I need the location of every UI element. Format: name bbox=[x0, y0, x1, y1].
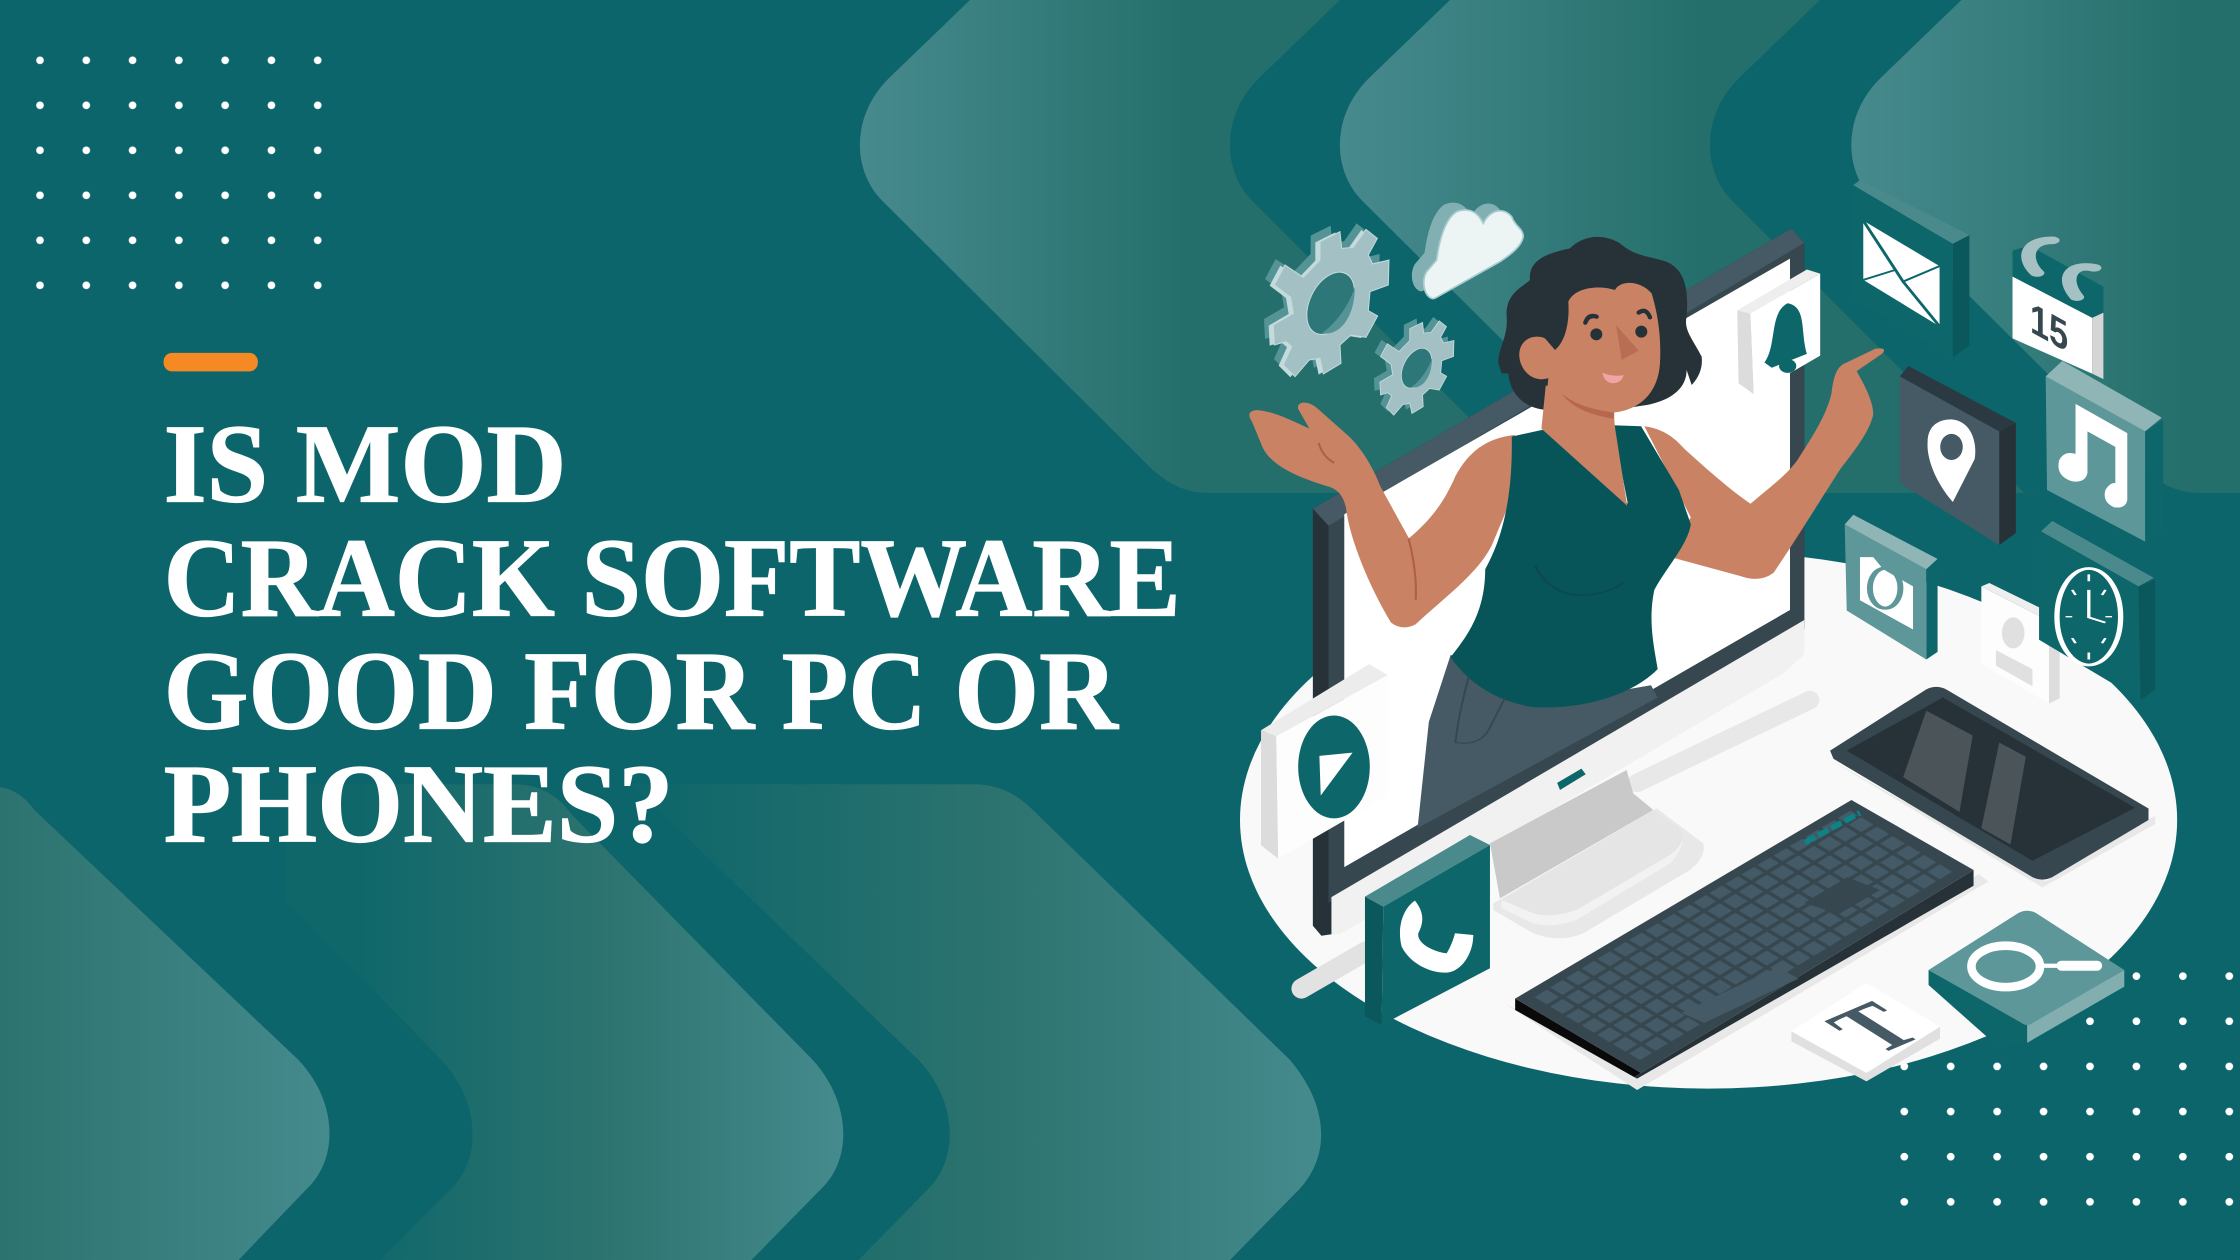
facial features bbox=[1562, 311, 1650, 419]
title bbox=[164, 401, 1181, 866]
title: IS MOD bbox=[164, 401, 566, 526]
icon: camera tile bbox=[1845, 515, 1938, 659]
icon: envelope tile bbox=[1853, 180, 1969, 357]
keyboard bbox=[1506, 800, 1989, 1090]
woman bbox=[1249, 237, 1884, 828]
keyboard gap and space bar bbox=[1681, 877, 1880, 1023]
icon: text tile: T bbox=[1805, 989, 1945, 1067]
icon: large gear bbox=[1264, 223, 1389, 377]
icon: cloud bbox=[1412, 203, 1523, 299]
icon: search tile bbox=[1929, 911, 2124, 1047]
icon: calendar tile: 15 bbox=[2030, 293, 2068, 362]
dot grid: bottom right bbox=[1881, 954, 2240, 1225]
face bbox=[1519, 283, 1660, 427]
smartphone bbox=[1825, 687, 2155, 887]
icon: play tile bbox=[1261, 664, 1388, 859]
icon: small gear bbox=[1374, 317, 1454, 415]
title: CRACK SOFTWARE bbox=[164, 516, 1181, 641]
arm creases bbox=[1319, 443, 1416, 600]
icon: calendar tile bbox=[2013, 240, 2103, 379]
bottom chevron shapes bbox=[0, 784, 1321, 1260]
trouser fold bbox=[1455, 677, 1505, 743]
icon: clock tile bbox=[2039, 521, 2155, 700]
title: GOOD FOR PC OR bbox=[164, 629, 1119, 754]
icon: location pin tile bbox=[1900, 366, 2016, 545]
desktop monitor bbox=[1301, 229, 1810, 989]
icon: phone call tile bbox=[1365, 835, 1490, 1025]
orange accent bar bbox=[164, 353, 258, 371]
icon: contact tile bbox=[1981, 583, 2060, 704]
neck and chest bbox=[1541, 386, 1627, 506]
right arm bbox=[1644, 348, 1884, 579]
monitor stand bbox=[1490, 770, 1704, 938]
hair bbox=[1498, 237, 1702, 410]
top chevron shapes bbox=[860, 0, 2240, 493]
icon: music tile bbox=[2046, 361, 2163, 542]
trousers bbox=[1418, 655, 1658, 828]
icon: bell tile bbox=[1737, 270, 1820, 394]
dress crease bbox=[1535, 566, 1625, 595]
white ellipse platform bbox=[1240, 551, 2177, 1089]
title: PHONES? bbox=[164, 741, 674, 866]
dot grid: top left bbox=[17, 38, 341, 308]
left arm bbox=[1249, 403, 1515, 627]
dress bbox=[1451, 425, 1691, 707]
